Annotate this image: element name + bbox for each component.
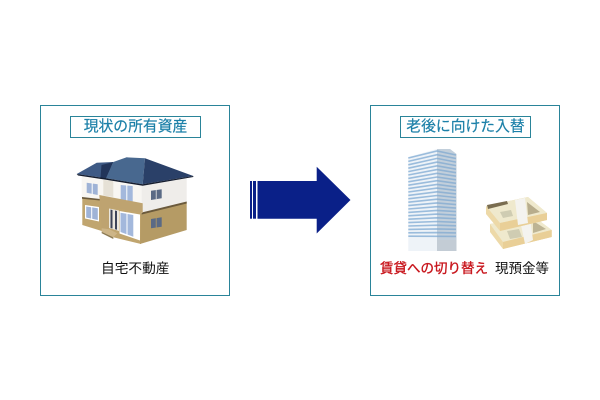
arrow: transition to the right xyxy=(250,167,350,234)
label: switch to rental: 賃貸への切り替え xyxy=(380,261,488,276)
label: owned home: 自宅不動産 xyxy=(101,261,169,276)
icon: high-rise building xyxy=(408,149,456,251)
heading: reallocation for retirement xyxy=(400,116,531,138)
panel: reallocation for retirement xyxy=(370,105,560,296)
heading: reallocation for retirement: 老後に向けた入替 xyxy=(406,119,525,135)
icon: house xyxy=(77,157,193,244)
icon: banknote bundles xyxy=(486,197,552,249)
label: cash and deposits: 現預金等 xyxy=(495,261,549,276)
heading: current assets: 現状の所有資産 xyxy=(84,119,187,135)
heading: current assets xyxy=(70,116,201,138)
panel: current assets xyxy=(40,105,230,296)
